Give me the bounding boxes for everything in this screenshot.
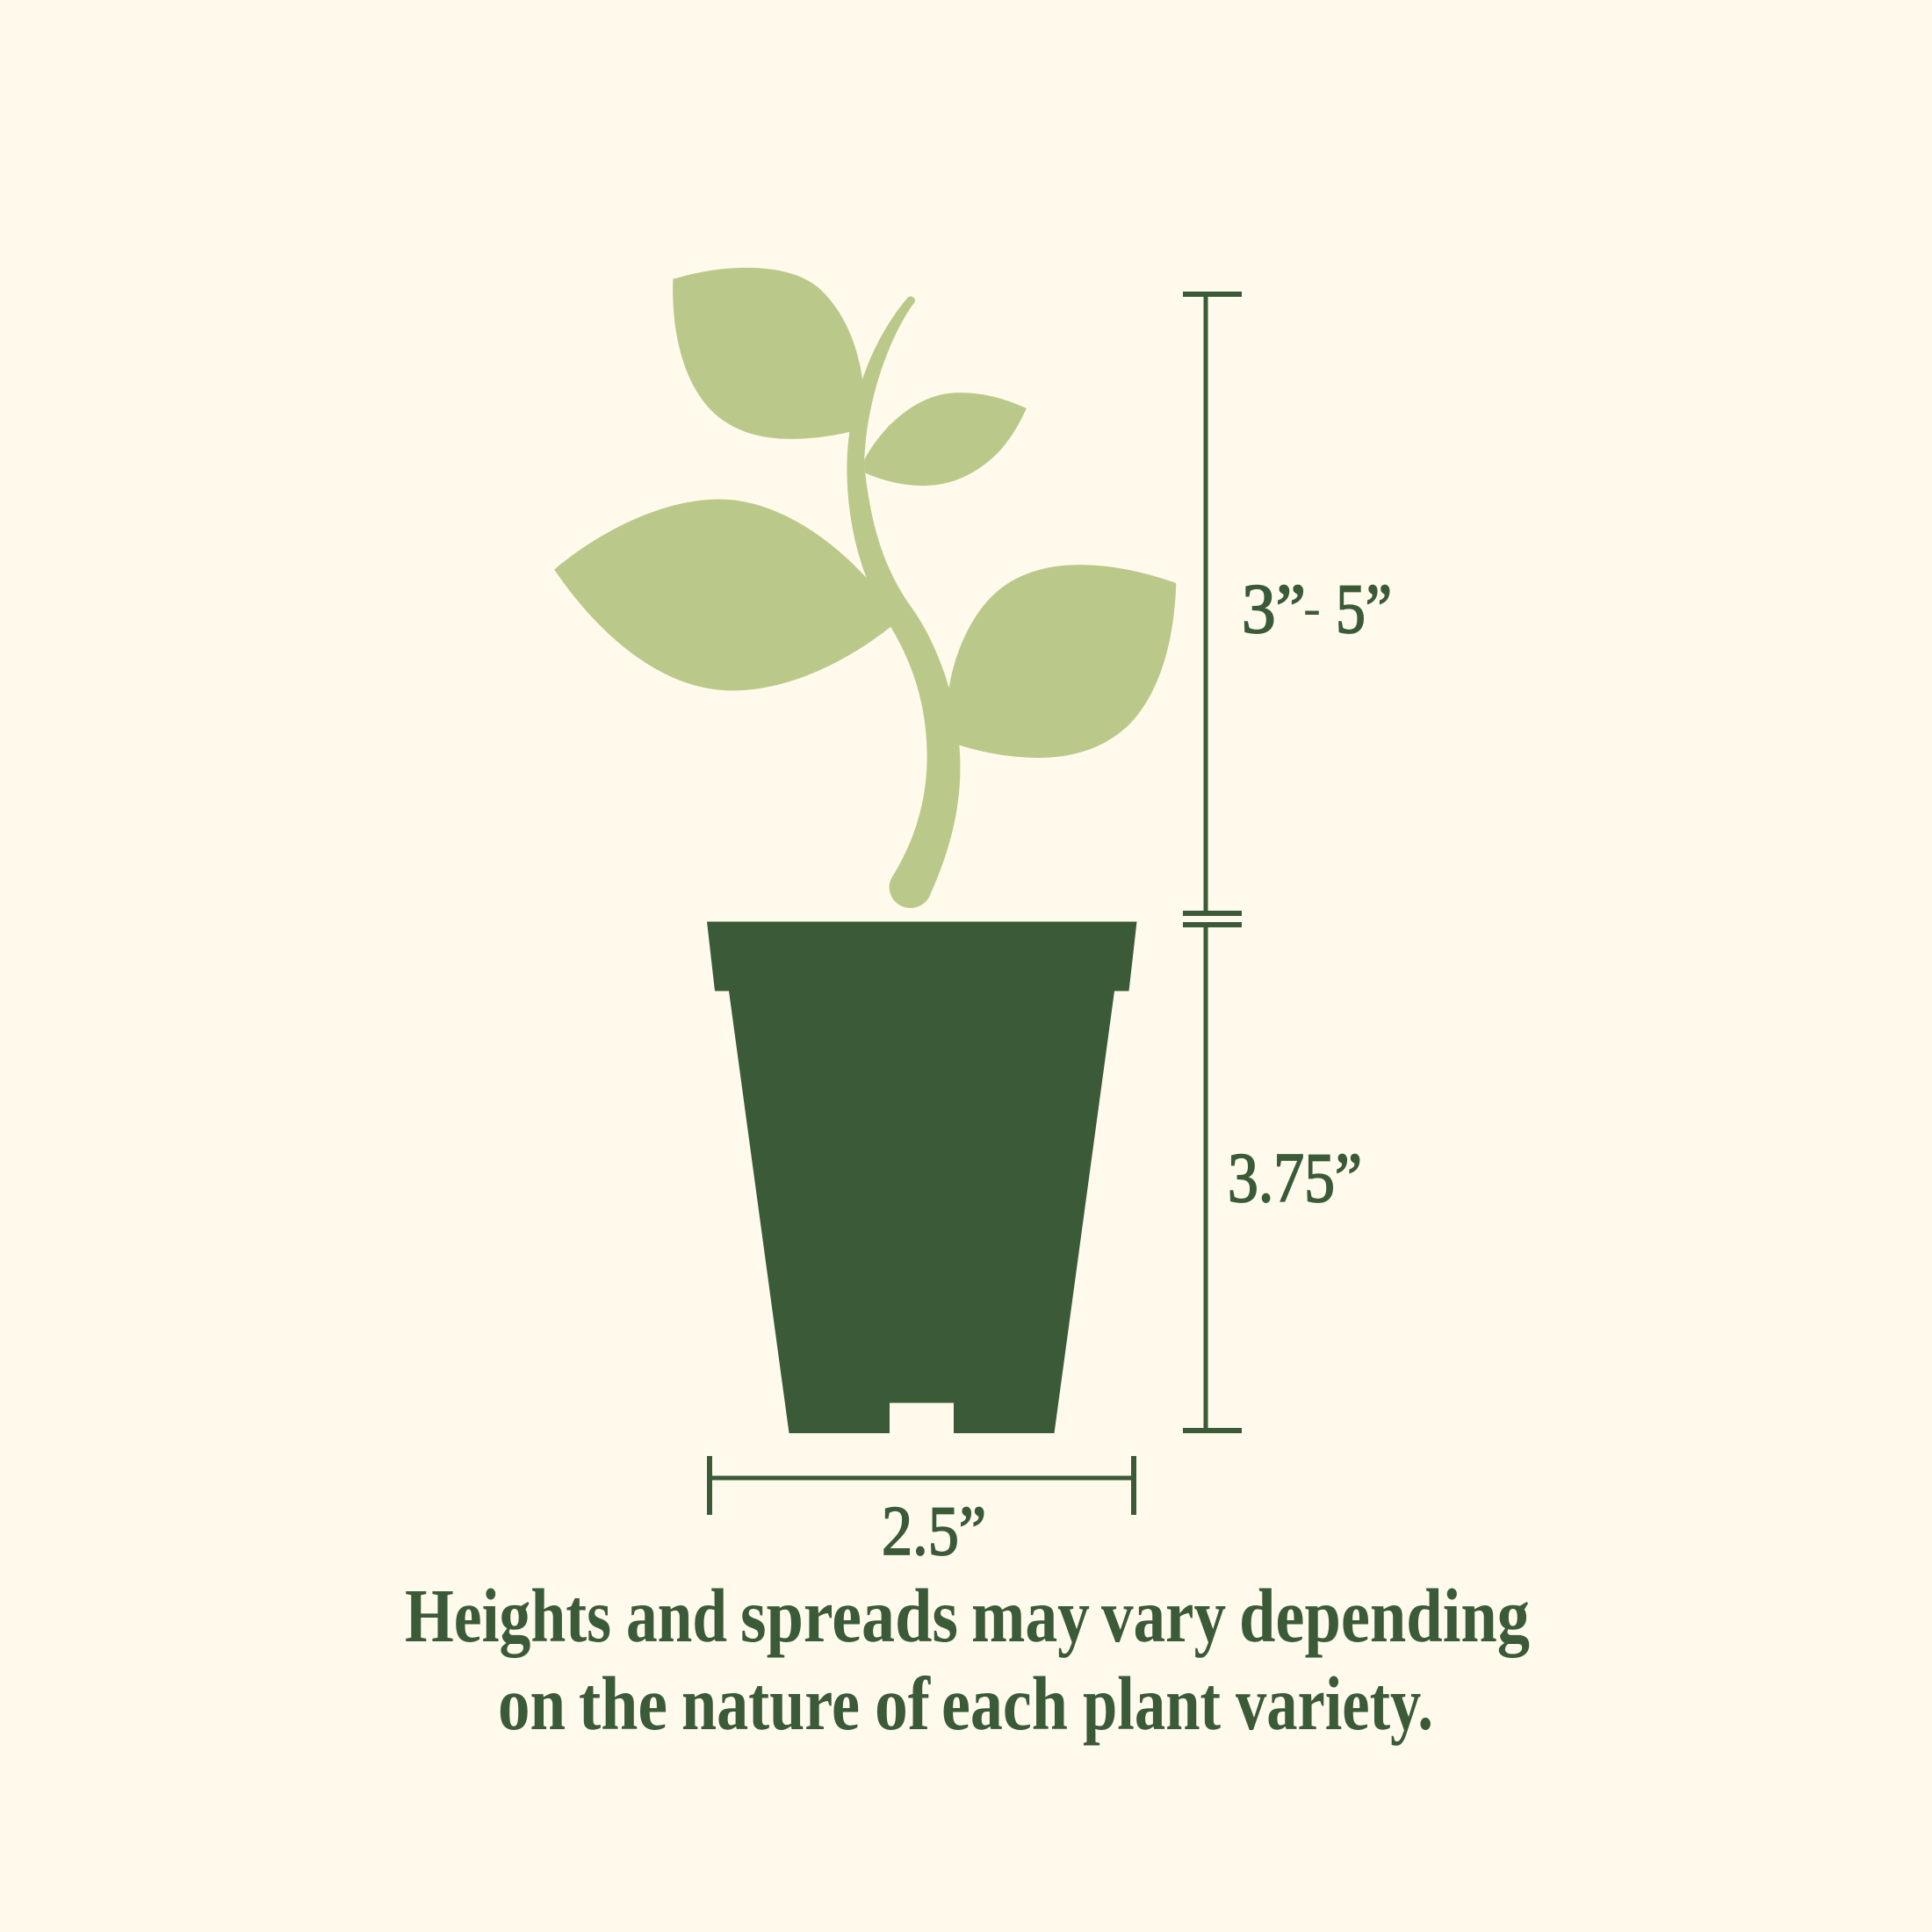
caption: spreads bbox=[740, 1573, 958, 1658]
caption: may bbox=[971, 1573, 1090, 1658]
dimension: plant height bracket bbox=[1183, 292, 1242, 916]
caption: depending bbox=[1239, 1573, 1530, 1658]
caption: and bbox=[626, 1573, 727, 1658]
caption: variety. bbox=[1236, 1661, 1433, 1746]
dimension: pot height label: 3.75” bbox=[1228, 1138, 1362, 1217]
pot bbox=[707, 922, 1136, 1433]
dimension: plant height label: - bbox=[1303, 579, 1321, 637]
dimension: pot height bracket bbox=[1183, 922, 1242, 1433]
leaf: small right bbox=[864, 393, 1027, 486]
leaf: large right bbox=[943, 565, 1176, 758]
caption: plant bbox=[1083, 1661, 1221, 1746]
caption: each bbox=[941, 1661, 1068, 1746]
dimension: pot width label: 2.5” bbox=[882, 1491, 986, 1570]
caption: Heights bbox=[405, 1573, 611, 1658]
caption: on bbox=[498, 1661, 566, 1746]
plant bbox=[554, 268, 1176, 908]
stem bbox=[847, 297, 960, 908]
leaf: top left bbox=[673, 268, 863, 439]
leaf: large left bbox=[554, 499, 898, 690]
caption bbox=[405, 1573, 1530, 1746]
dimension: plant height label: 3” bbox=[1242, 569, 1306, 648]
caption: nature bbox=[681, 1661, 860, 1746]
caption: the bbox=[579, 1661, 667, 1746]
caption: vary bbox=[1101, 1573, 1226, 1658]
dimension: plant height label: 5” bbox=[1336, 569, 1392, 648]
dimension: pot width bracket bbox=[707, 1456, 1136, 1515]
caption: of bbox=[875, 1661, 931, 1746]
